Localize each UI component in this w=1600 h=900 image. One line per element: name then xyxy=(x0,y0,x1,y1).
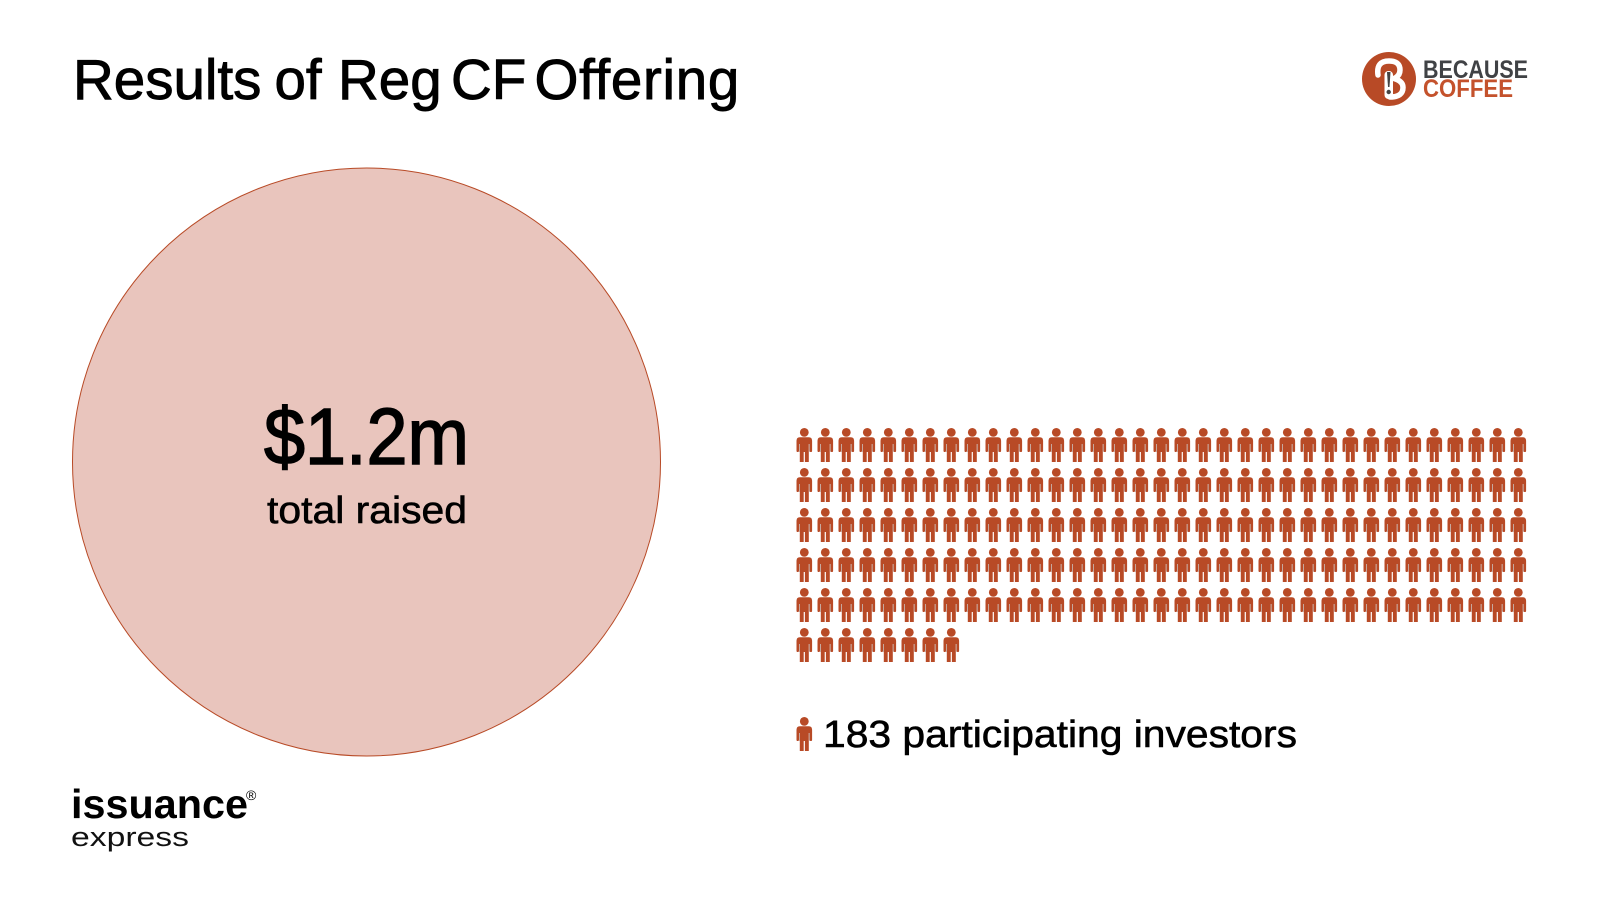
icon: person xyxy=(796,717,812,751)
title: Offering xyxy=(534,48,740,111)
title: Results xyxy=(73,48,261,111)
legend label: 183 participating investors xyxy=(823,714,1297,756)
logo: Because Coffee xyxy=(1362,52,1528,106)
panel: total raised circle xyxy=(72,168,660,756)
title: CF xyxy=(451,48,526,111)
pictogram: 183 investors xyxy=(796,428,1526,662)
total raised label: total raised xyxy=(267,490,467,532)
icon: Because Coffee badge xyxy=(1362,52,1416,106)
logo word: because: BECAUSE xyxy=(1423,56,1528,84)
logo: issuance express xyxy=(71,781,257,852)
logo word: express: express xyxy=(71,822,189,852)
legend: participating investors xyxy=(796,714,1297,756)
amount raised: $1.2m xyxy=(264,392,469,481)
title: of xyxy=(274,48,322,111)
logo word: issuance: issuance xyxy=(71,781,248,827)
logo word: coffee: COFFEE xyxy=(1423,75,1513,103)
title: Reg xyxy=(338,48,442,111)
registered mark: ® xyxy=(246,787,257,803)
